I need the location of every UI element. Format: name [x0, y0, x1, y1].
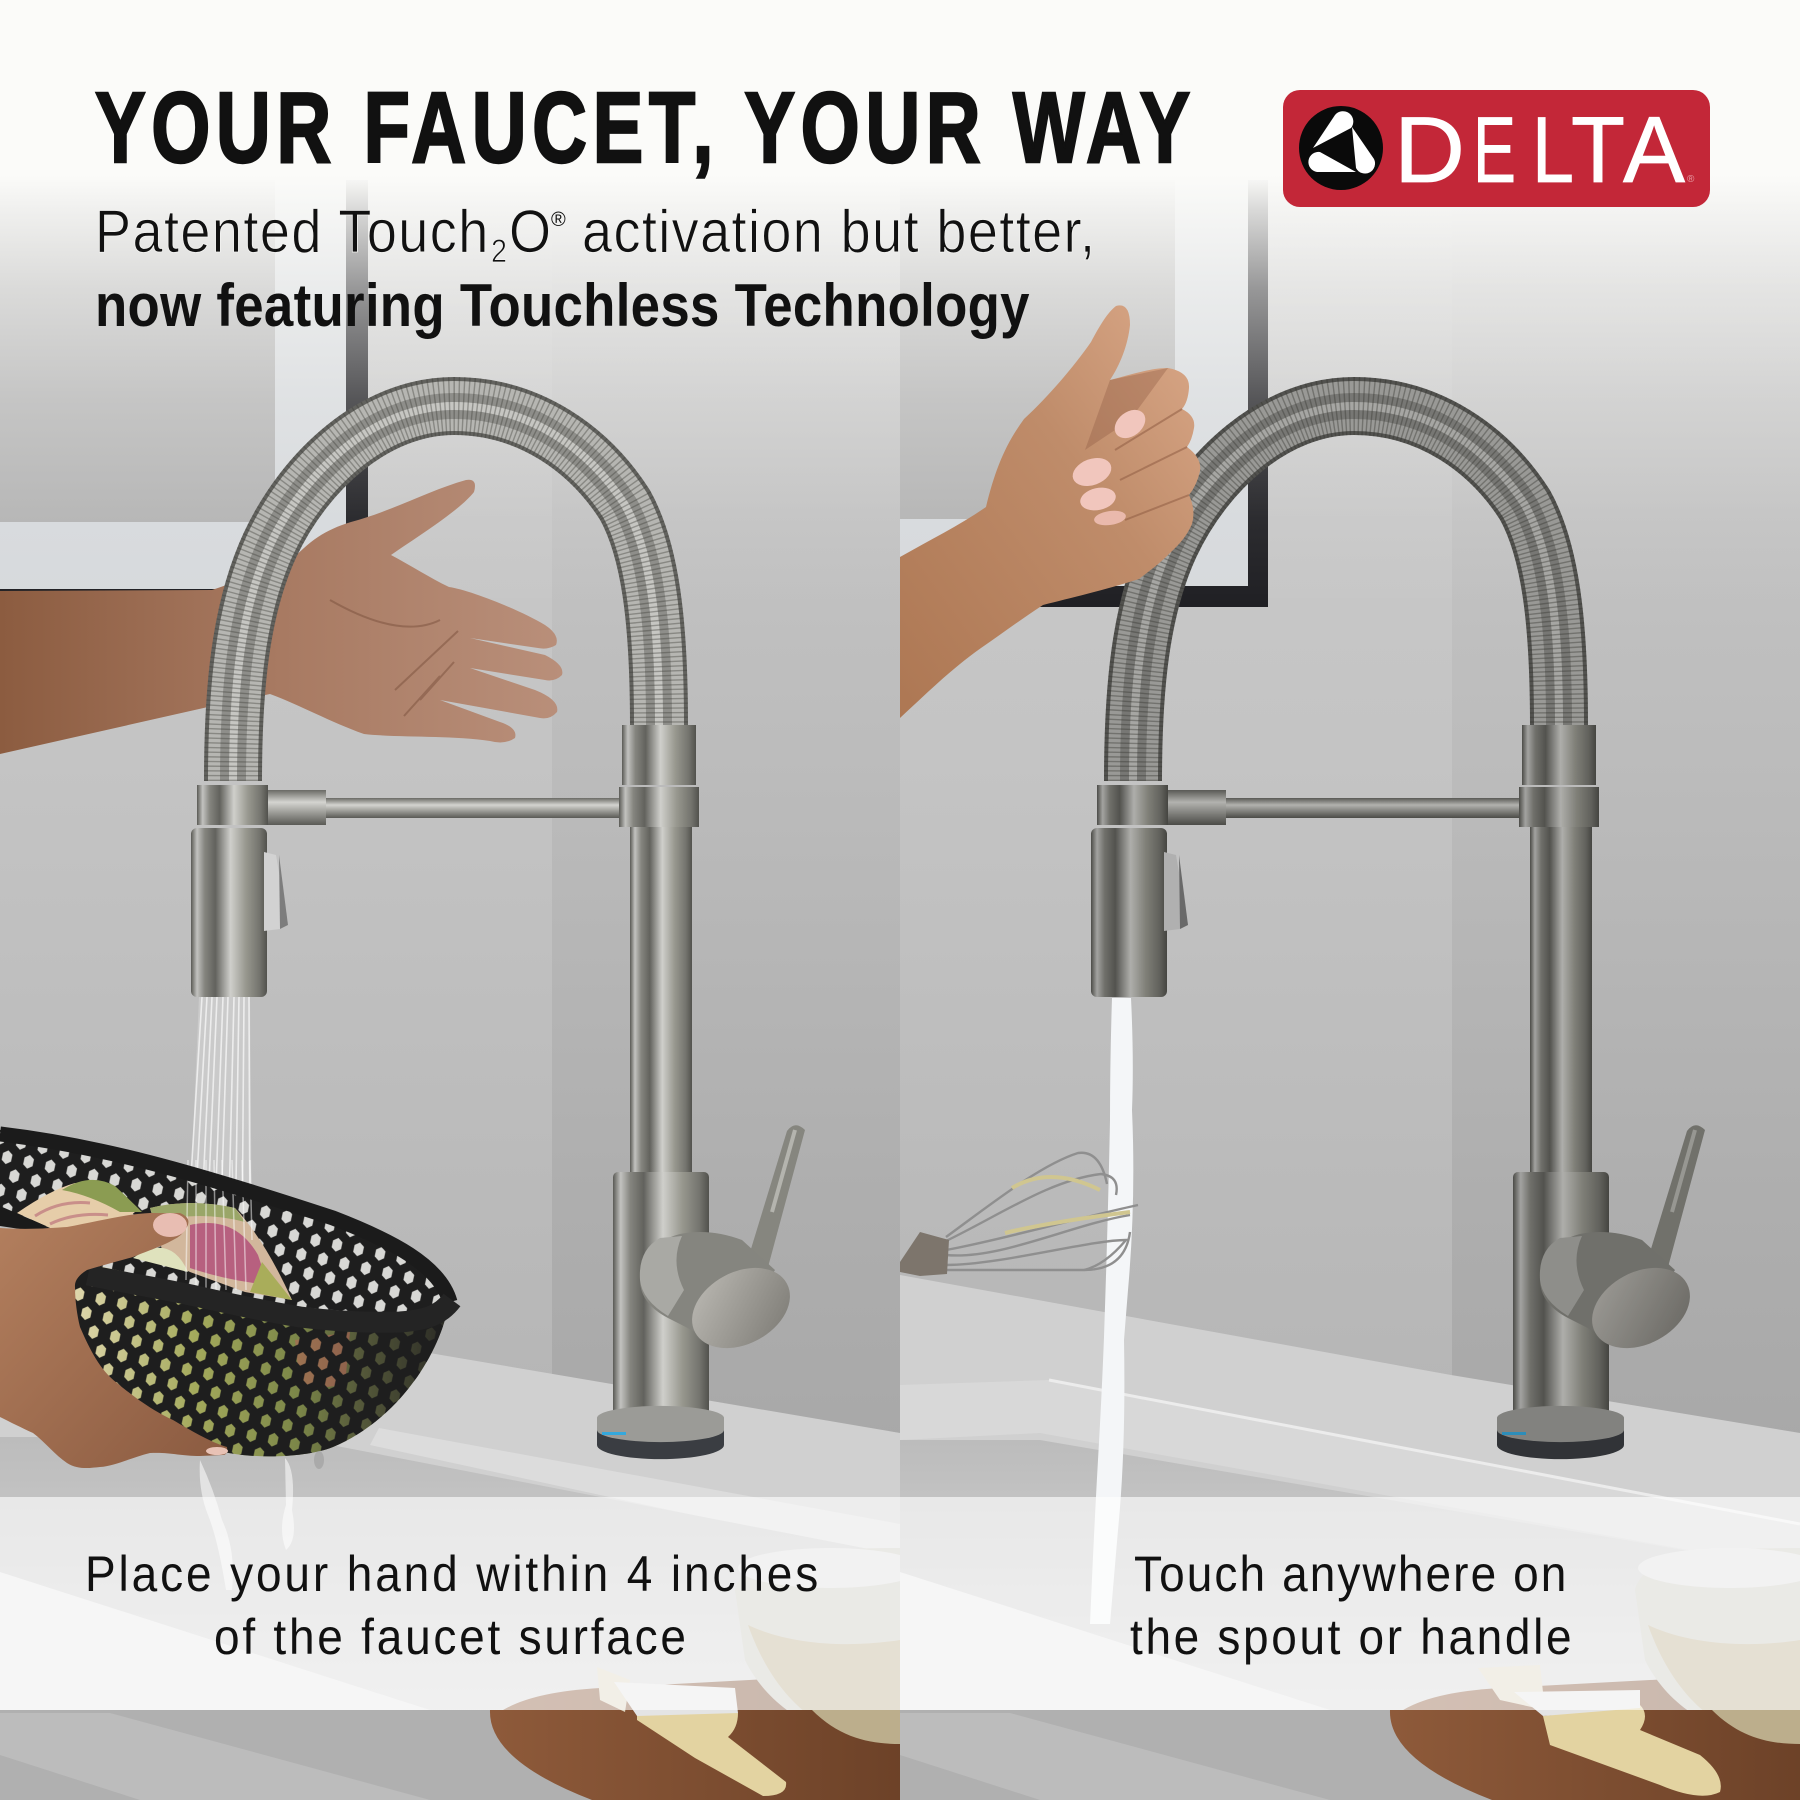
- hand holding colander: [0, 1213, 228, 1468]
- left countertop: [0, 1354, 900, 1524]
- colander left rim piece: [0, 1207, 46, 1229]
- water drips: [200, 1451, 324, 1590]
- top white fade right: [900, 0, 1800, 553]
- right sink lip: [900, 1380, 1800, 1570]
- subtitle line one: Patented Touch: [95, 198, 488, 266]
- subtitle line two: now featuring Touchless Technology: [95, 272, 1030, 339]
- wordmark: D: [1394, 97, 1465, 202]
- left wall: [0, 214, 552, 1374]
- wordmark: L: [1532, 97, 1574, 202]
- left pastry brush: [599, 1684, 786, 1796]
- subtitle line one: ®: [551, 209, 566, 231]
- lower cutting board: [490, 1710, 900, 1800]
- colander back wall: [0, 1130, 452, 1320]
- subtitle line one: activation but better,: [582, 198, 1095, 266]
- Delta logo: [1283, 90, 1710, 207]
- colander back rim: [0, 1134, 450, 1302]
- caption left: [88, 1554, 817, 1654]
- left water spray: [190, 997, 252, 1184]
- right faucet: [1091, 406, 1705, 1459]
- water falling on artichoke: [186, 1160, 252, 1290]
- right countertop: [900, 1275, 1800, 1550]
- caption right: the spout or handle: [1130, 1610, 1572, 1665]
- caption right: Touch anywhere on: [1134, 1547, 1566, 1602]
- caption right: [1130, 1547, 1572, 1665]
- caption band left: [0, 1497, 900, 1710]
- right sink lip highlight: [1049, 1380, 1800, 1524]
- right pastry brush: [1478, 1665, 1721, 1796]
- top white fade left: [0, 0, 900, 524]
- logo mark: [1299, 106, 1383, 190]
- left arm and open hand: [0, 480, 562, 754]
- whisk: [900, 1153, 1138, 1276]
- artichoke: [17, 1180, 292, 1300]
- left bowl and cutting board: [503, 1548, 900, 1710]
- subtitle line one: [95, 198, 1095, 269]
- right lower bowl base: [1712, 1710, 1800, 1744]
- subtitle line one: 2: [491, 233, 507, 269]
- Delta logo: ®: [1687, 174, 1695, 185]
- wordmark: [1394, 97, 1685, 202]
- left sink lip highlight: [370, 1428, 752, 1497]
- title: YOUR FAUCET, YOUR WAY: [95, 72, 1190, 183]
- left wall panel seam: [552, 754, 900, 1433]
- right lower counter: [900, 1710, 1800, 1800]
- left faucet: [191, 406, 805, 1459]
- lower bowl base: [812, 1710, 900, 1744]
- left framed picture: [0, 180, 368, 595]
- panel: right kitchen scene: [900, 183, 1800, 1800]
- caption left: Place your hand within 4 inches: [85, 1547, 818, 1602]
- right arm and touching hand: [900, 305, 1200, 718]
- colander front rim: [88, 1275, 452, 1322]
- right bowl and cutting board: [1388, 1548, 1800, 1800]
- left sink front rim: [0, 1572, 200, 1636]
- right sink interior: [900, 1440, 1372, 1497]
- wordmark: T: [1571, 97, 1625, 202]
- left sink interior: [0, 1437, 828, 1542]
- lower counter: [0, 1710, 592, 1800]
- colander front bowl: [60, 1262, 445, 1456]
- wordmark: E: [1473, 97, 1516, 202]
- right lower cutting board: [1390, 1710, 1800, 1800]
- subtitle line one: O: [509, 198, 551, 265]
- caption left: of the faucet surface: [214, 1610, 686, 1665]
- right sink front rim: [900, 1572, 1104, 1638]
- right framed picture: [900, 180, 1268, 607]
- caption band right: [900, 1497, 1800, 1710]
- panel: left kitchen scene: [0, 183, 900, 1800]
- wordmark: A: [1623, 97, 1685, 202]
- right lower rim stripe: [900, 1713, 1330, 1800]
- right water stream: [1090, 998, 1133, 1624]
- colander back mesh: [0, 1130, 452, 1320]
- lower rim stripe: [0, 1713, 430, 1800]
- right wall panel seam: [1452, 754, 1800, 1433]
- right wall: [900, 214, 1452, 1376]
